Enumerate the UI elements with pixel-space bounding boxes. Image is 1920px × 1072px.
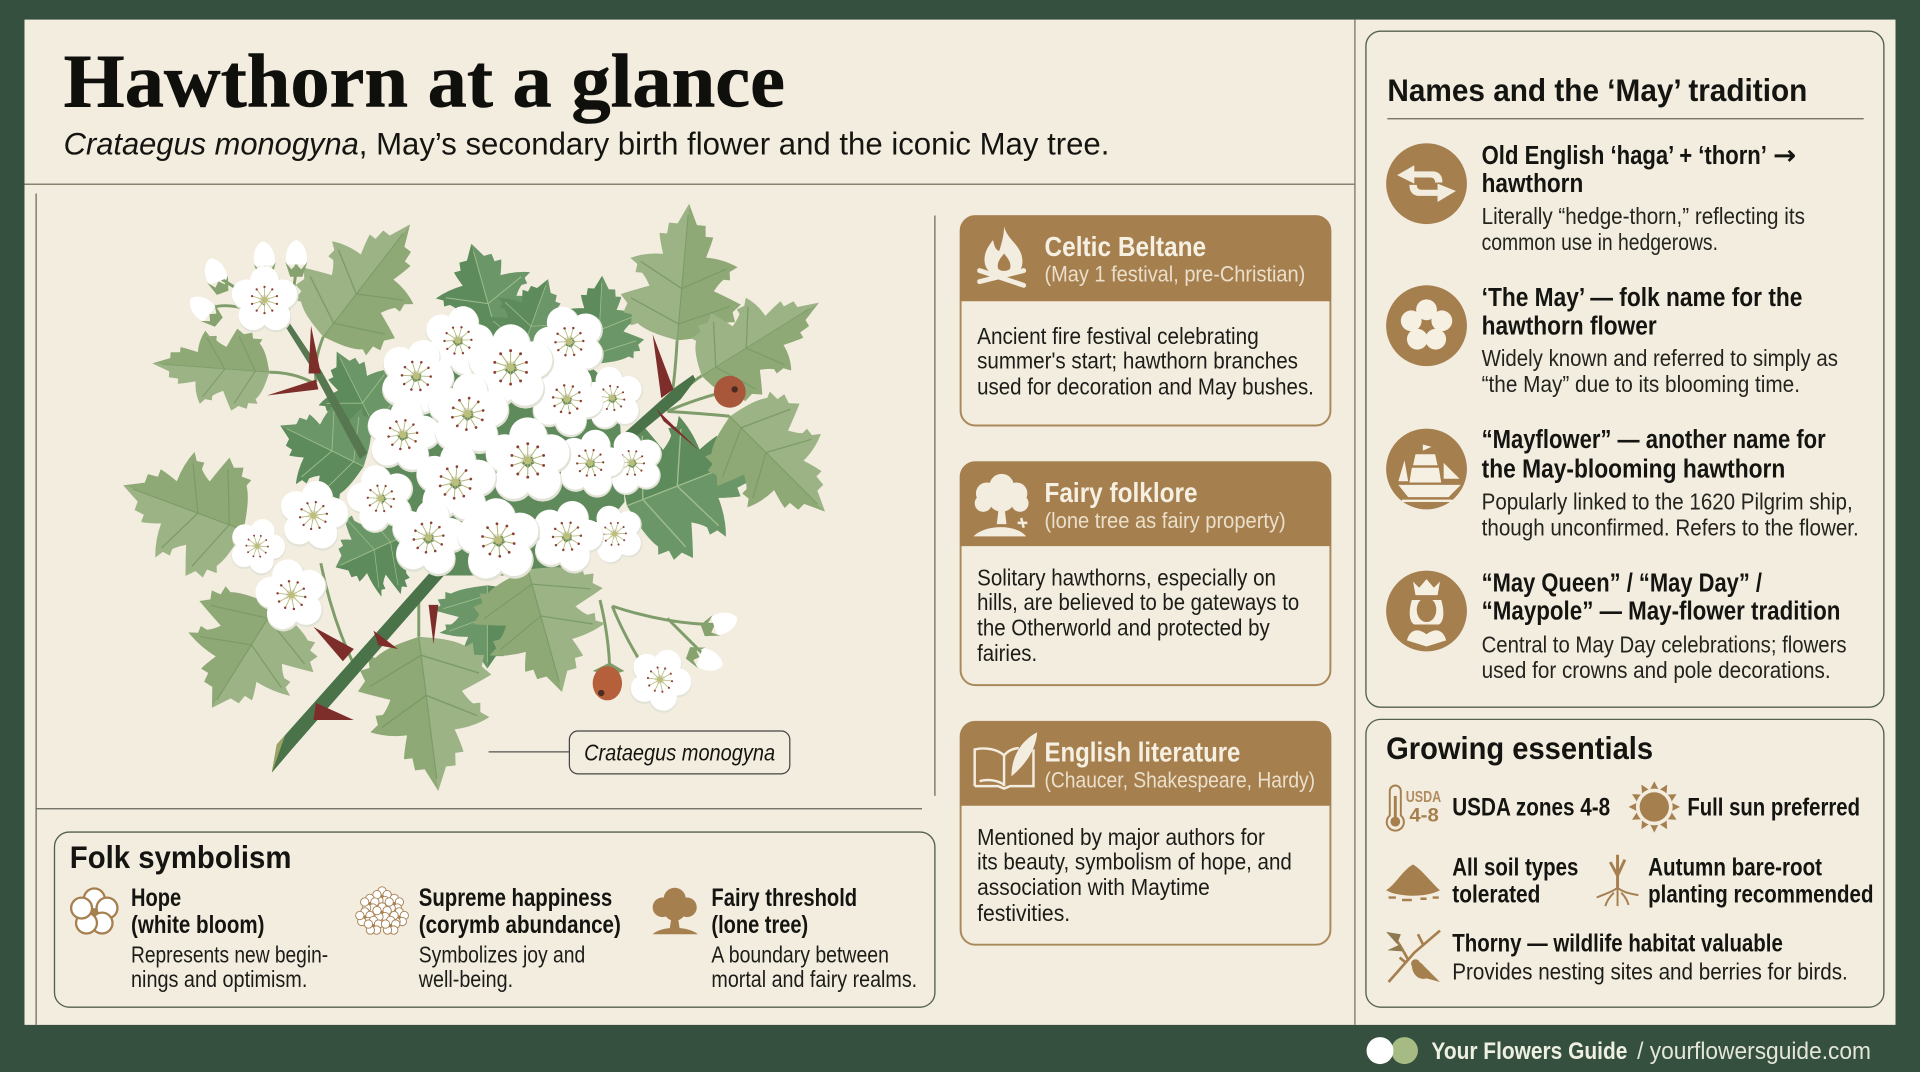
item: hope: Represents new begin- [131,941,328,967]
card: English literature: its beauty, symbolism of hope, and [977,848,1292,874]
heading: growing: Growing essentials [1386,730,1653,766]
item: hope: Hope [131,884,181,912]
leaf stems [208,260,730,683]
card: Celtic Beltane: Ancient fire festival celebrating [977,323,1259,349]
icon: corymb cluster [356,887,408,934]
heading: names: Names and the ‘May’ tradition [1387,72,1807,108]
light leaves [101,189,866,799]
card: Fairy folklore: fairies. [977,640,1037,666]
icon: thermometer USDA: 4-8 [1409,805,1439,827]
main stems [272,322,696,773]
label: soil [1452,854,1578,908]
item: Old English [1386,140,1805,255]
item: Old English: Old English ‘haga’ + ‘thorn’ [1482,140,1767,170]
card: Celtic Beltane: summer's start; hawthorn branches [977,348,1298,374]
label: USDA zones: USDA zones 4-8 [1452,794,1610,822]
item: May Queen: “Maypole” — May-flower tradition [1482,596,1840,626]
flowers [222,266,702,720]
item: The May [1386,282,1838,397]
icon: lone tree [653,888,698,934]
item: May Queen: used for crowns and pole decorations. [1482,657,1831,683]
card: Fairy folklore: the Otherworld and protected by [977,615,1270,641]
panel: growing essentials [1366,719,1884,1007]
icon: five-petal flower [1386,285,1467,366]
item: The May: Widely known and referred to simply as [1482,345,1838,371]
label: thorny: Thorny — wildlife habitat valuable [1452,929,1783,957]
footer brand: Your Flowers Guide [1431,1038,1627,1065]
card: Fairy folklore: Fairy folklore [1044,477,1198,508]
item: Mayflower: though unconfirmed. Refers to the flower. [1482,515,1859,541]
icon: bare root [1597,855,1638,906]
item: Mayflower [1386,424,1859,541]
label: autumn planting: planting recommended [1648,880,1873,908]
icon: lone tree on hill [973,474,1029,536]
background dark leaves [257,229,786,669]
card: English literature: (Chaucer, Shakespeare, Hardy) [1044,767,1315,792]
card: Fairy folklore: (lone tree as fairy property) [1044,508,1286,533]
label: thorny: Provides nesting sites and berries for birds. [1452,959,1848,985]
icon: white bloom [71,889,117,933]
icon: sun [1629,781,1680,833]
title: Hawthorn at a glance [64,40,785,124]
panel: names and the May tradition [1366,31,1884,707]
card: Celtic Beltane [960,216,1331,426]
card: English literature: Mentioned by major authors for [977,824,1265,850]
item: The May: ‘The May’ — folk name for the [1482,282,1802,312]
card: Celtic Beltane: used for decoration and May bushes. [977,373,1314,399]
icon: thorny branch and bird [1386,931,1440,982]
label: full sun: Full sun preferred [1687,794,1860,822]
icon: ship [1386,429,1467,509]
item: supreme happiness [356,884,621,992]
card: Fairy folklore: hills, are believed to be gateways to [977,589,1299,615]
card header [960,721,1331,806]
illustration: hawthorn branch [101,189,866,799]
item: The May: “the May” due to its blooming time. [1482,371,1800,397]
label: autumn planting: Autumn bare-root [1648,854,1823,882]
item: Old English: Literally “hedge-thorn,” reflecting its [1482,203,1805,229]
item: fairy threshold [653,884,917,992]
item: Old English: hawthorn [1482,168,1583,198]
icon: brand circles [1367,1037,1418,1064]
icon: queen with crown [1386,571,1467,651]
card header [960,462,1331,546]
card: English literature: English literature [1044,737,1240,768]
item: The May: hawthorn flower [1482,310,1657,340]
item: hope: nings and optimism. [131,966,307,992]
subtitle: Crataegus monogyna [64,126,359,161]
item: supreme happiness: well-being. [418,966,513,992]
item: May Queen [1386,567,1847,683]
card: English literature: association with Maytime [977,874,1210,900]
item: Old English: → [1773,141,1796,171]
item: May Queen: “May Queen” / “May Day” / [1482,567,1763,597]
item: Old English: common use in hedgerows. [1482,229,1718,255]
icon: swap arrows [1386,143,1467,224]
heading: folk symbolism: Folk symbolism [70,839,291,875]
item: supreme happiness: Symbolizes joy and [419,941,585,967]
card header [960,216,1331,301]
panel: folk symbolism [54,832,935,1007]
item: fairy threshold: A boundary between [711,941,889,967]
icon: thermometer USDA: USDA [1406,789,1441,806]
icon: book and quill [975,732,1037,789]
item: hope [71,884,328,992]
item: fairy threshold: (lone tree) [711,911,808,939]
buds [184,240,741,676]
item: Mayflower: “Mayflower” — another name for [1482,424,1826,454]
label: soil: tolerated [1452,880,1540,908]
card: Fairy folklore [960,462,1331,685]
berries [593,376,746,700]
item: fairy threshold: mortal and fairy realms. [711,966,917,992]
card: Celtic Beltane: Celtic Beltane [1044,231,1206,262]
caption: species name [489,731,790,774]
item: Mayflower: the May-blooming hawthorn [1482,454,1785,484]
item: hope: (white bloom) [131,911,264,939]
card: Celtic Beltane: (May 1 festival, pre-Christian) [1044,262,1305,287]
item: fairy threshold: Fairy threshold [711,884,857,912]
item: supreme happiness: Supreme happiness [419,884,612,912]
label: thorny [1452,929,1848,985]
card: English literature [960,721,1331,945]
icon: bonfire [980,227,1024,285]
label: autumn planting [1648,854,1873,908]
footer brand: / yourflowersguide.com [1637,1038,1871,1065]
icon: thermometer USDA [1387,786,1441,831]
item: Mayflower: Popularly linked to the 1620 Pilgrim ship, [1482,488,1853,514]
thorns [267,326,699,720]
footer brand [1367,1037,1871,1065]
caption: species name: Crataegus monogyna [584,739,775,765]
card: English literature: festivities. [977,900,1070,926]
label: soil: All soil types [1452,854,1578,882]
item: May Queen: Central to May Day celebrations; flowers [1482,632,1847,658]
subtitle: , May’s secondary birth flower and the iconic May tree. [359,126,1109,161]
icon: soil mound [1386,864,1440,900]
card: Fairy folklore: Solitary hawthorns, especially on [977,564,1276,590]
item: supreme happiness: (corymb abundance) [419,911,621,939]
